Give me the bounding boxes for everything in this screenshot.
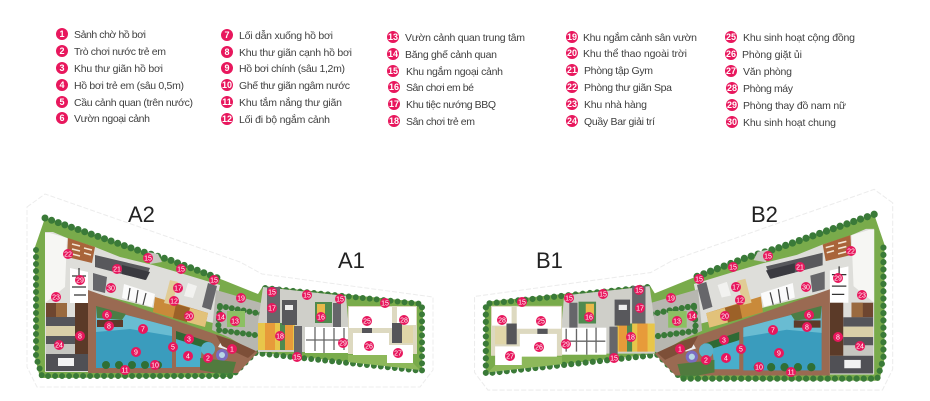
number markers: towers A1 and A2: 15 [293,354,301,362]
number markers: towers B1 and B2: 19 [667,296,675,302]
legend: amenities 19-24: 20 [567,48,577,58]
number markers: towers B1 and B2: 15 [565,296,573,302]
number markers: towers A1 and A2: 24 [55,342,63,350]
legend: amenities 1-6: 4 [59,80,65,90]
legend: amenities 13-18: Sân chơi em bé [406,82,474,94]
site plan: towers B1 and B2 [475,189,893,390]
number markers: towers A1 and A2: 18 [276,334,284,340]
number markers: towers B1 and B2: 18 [627,334,635,342]
number markers: towers A1 and A2: 21 [113,266,121,274]
legend: amenities 13-18: 15 [388,66,398,76]
number markers: towers A1 and A2: 15 [177,266,185,274]
legend: amenities 7-12: Khu thư giãn cạnh hồ bơi [239,47,352,59]
number markers: towers B1 and B2: 15 [729,264,737,272]
legend: amenities 13-18: Sân chơi trẻ em [406,116,475,128]
number markers: towers A1 and A2: 12 [170,298,178,306]
number markers: towers A1 and A2: 22 [64,252,72,258]
legend: amenities 25-30: Khu sinh hoạt cộng đồng [743,32,855,44]
number markers: towers B1 and B2: 8 [836,334,840,342]
legend: amenities 19-24: Khu ngắm cảnh sân vườn [583,31,697,44]
number markers: towers A1 and A2: 8 [78,334,82,340]
legend: amenities 1-6: Vườn ngoại cảnh [74,113,150,125]
legend: amenities 1-6 [56,28,193,125]
legend: amenities 7-12: 10 [222,80,232,90]
number markers: towers B1 and B2: 6 [807,312,811,320]
heading: B2: B2 [751,202,778,227]
legend: amenities 19-24: Phòng thư giãn Spa [584,82,672,94]
legend: amenities 1-6: 6 [59,113,65,123]
legend: amenities 25-30 [725,31,855,129]
legend: amenities 7-12: Lối đi bộ ngắm cảnh [239,113,330,126]
number markers: towers A1 and A2: 7 [141,326,145,334]
legend: amenities 13-18: Băng ghế cảnh quan [405,49,497,61]
number markers: towers A1 and A2: 29 [339,340,347,348]
legend: amenities 19-24 [566,31,697,128]
number markers: towers B1 and B2: 28 [498,318,506,324]
legend: amenities 25-30: 28 [727,83,737,93]
legend: amenities 1-6: 5 [59,97,65,107]
legend: amenities 1-6: 3 [59,63,65,73]
number markers: towers A1 and A2: 15 [268,290,276,296]
legend: amenities 13-18: Vườn cảnh quan trung tâm [405,32,525,44]
number markers: towers B1 and B2: 10 [755,364,763,372]
heading: A2: A2 [128,202,155,227]
number markers: towers A1 and A2: 16 [317,314,325,322]
legend: amenities 7-12: 7 [224,30,230,40]
number markers: towers A1 and A2 [51,249,409,375]
number markers: towers A1 and A2: 3 [187,336,191,344]
number markers: towers B1 and B2: 2 [704,358,708,364]
legend: amenities 7-12: Khu tắm nắng thư giãn [239,96,342,109]
number markers: towers A1 and A2: 5 [171,344,175,352]
number markers: towers A1 and A2: 20 [185,314,193,320]
number markers: towers B1 and B2 [497,246,867,377]
number markers: towers A1 and A2: 27 [394,350,402,358]
legend: amenities 7-12: Ghế thư giãn ngâm nước [239,80,350,92]
legend: amenities 19-24: 21 [567,65,577,75]
number markers: towers B1 and B2: 25 [537,318,545,326]
legend: amenities 1-6: 1 [59,29,65,39]
number markers: towers B1 and B2: 3 [722,338,726,344]
number markers: towers B1 and B2: 22 [847,248,855,256]
legend: amenities 1-6: Cầu cảnh quan (trên nước) [74,97,193,109]
legend: amenities 7-12: 9 [224,63,230,73]
number markers: towers B1 and B2: 14 [688,314,696,320]
legend: amenities 13-18: Khu tiệc nướng BBQ [406,99,496,111]
legend: amenities 13-18: 18 [389,116,399,126]
number markers: towers B1 and B2: 9 [777,350,781,358]
number markers: towers A1 and A2: 23 [52,294,60,302]
heading: B1: B1 [536,248,563,273]
number markers: towers B1 and B2: 15 [764,254,772,260]
number markers: towers B1 and B2: 17 [636,306,644,312]
legend: amenities 13-18 [387,31,525,128]
legend: amenities 1-6: Khu thư giãn hồ bơi [74,63,163,75]
number markers: towers B1 and B2: 13 [673,318,681,326]
number markers: towers B1 and B2: 17 [732,284,740,292]
number markers: towers B1 and B2: 26 [535,344,543,352]
legend: amenities 7-12: 11 [222,97,232,107]
legend: amenities 25-30: Phòng thay đồ nam nữ [743,100,846,112]
number markers: towers A1 and A2: 15 [144,256,152,262]
number markers: towers B1 and B2: 16 [585,314,593,322]
number markers: towers A1 and A2: 17 [268,306,276,312]
legend: amenities 7-12: 12 [222,114,232,124]
number markers: towers B1 and B2: 30 [802,284,810,292]
legend: amenities 13-18: Khu ngắm ngoại cảnh [406,65,503,78]
number markers: towers A1 and A2: 2 [206,356,210,362]
legend: amenities 25-30: 29 [727,100,737,110]
legend: amenities 25-30: 26 [726,49,736,59]
number markers: towers A1 and A2: 15 [336,296,344,304]
number markers: towers A1 and A2: 17 [174,286,182,292]
legend: amenities 25-30: Phòng giặt ủi [742,49,802,61]
number markers: towers B1 and B2: 27 [506,354,514,360]
number markers: towers A1 and A2: 8 [107,324,111,330]
number markers: towers A1 and A2: 9 [134,350,138,356]
number markers: towers A1 and A2: 28 [400,318,408,324]
number markers: towers B1 and B2: 8 [805,324,809,332]
legend: amenities 19-24: 24 [567,116,577,126]
legend: amenities 19-24: Quầy Bar giải trí [584,116,655,128]
number markers: towers B1 and B2: 15 [518,300,526,306]
number markers: towers A1 and A2: 4 [186,354,190,360]
legend: amenities 19-24: Khu thể thao ngoài trời [583,48,687,60]
number markers: towers B1 and B2: 29 [834,276,842,282]
number markers: towers B1 and B2: 1 [678,346,682,354]
legend: amenities 7-12 [221,29,352,126]
number markers: towers A1 and A2: 15 [303,292,311,300]
legend: amenities 13-18: 14 [388,49,398,59]
number markers: towers A1 and A2: 10 [151,362,159,370]
number markers: towers B1 and B2: 23 [858,292,866,300]
legend: amenities 13-18: 16 [389,82,399,92]
legend: amenities 19-24: 23 [567,99,577,109]
number markers: towers A1 and A2: 26 [365,344,373,350]
number markers: towers A1 and A2: 15 [210,278,218,284]
number markers: towers B1 and B2: 21 [796,264,804,272]
number markers: towers B1 and B2: 15 [610,356,618,362]
legend: amenities 19-24: 22 [567,82,577,92]
legend: amenities 25-30: Khu sinh hoạt chung [743,117,836,129]
number markers: towers A1 and A2: 25 [363,318,371,326]
number markers: towers B1 and B2: 20 [721,314,729,320]
number markers: towers B1 and B2: 12 [736,298,744,304]
legend: amenities 19-24: Phòng tập Gym [584,65,653,77]
number markers: towers B1 and B2: 5 [739,346,743,354]
legend: amenities 19-24: Khu nhà hàng [584,99,647,111]
legend: amenities 7-12: Lối dẫn xuống hồ bơi [239,29,333,42]
legend: amenities 7-12: Hồ bơi chính (sâu 1,2m) [239,63,345,75]
number markers: towers A1 and A2: 14 [217,314,225,322]
legend: amenities 25-30: Văn phòng [743,66,792,78]
number markers: towers B1 and B2: 15 [635,288,643,294]
legend: amenities 1-6: Trò chơi nước trẻ em [74,46,166,58]
legend: amenities 25-30: 30 [727,117,737,127]
legend: amenities 13-18: 13 [388,32,398,42]
legend: amenities 25-30: 27 [726,66,736,76]
legend: amenities 7-12: 8 [224,47,230,57]
number markers: towers B1 and B2: 15 [695,276,703,284]
number markers: towers A1 and A2: 11 [121,368,129,374]
number markers: towers B1 and B2: 7 [771,328,775,334]
legend: amenities 19-24: 19 [567,32,577,42]
legend: amenities 1-6: Hồ bơi trẻ em (sâu 0,5m) [74,80,184,92]
legend: amenities 25-30: Phòng máy [743,83,794,95]
legend: amenities 1-6: Sảnh chờ hồ bơi [74,29,146,41]
number markers: towers B1 and B2: 11 [787,370,795,376]
number markers: towers A1 and A2: 15 [381,300,389,308]
number markers: towers B1 and B2: 24 [856,344,864,350]
number markers: towers A1 and A2: 19 [237,296,245,302]
number markers: towers B1 and B2: 4 [724,356,728,362]
legend: amenities 25-30: 25 [726,32,736,42]
number markers: towers B1 and B2: 29 [562,342,570,348]
heading: A1: A1 [338,248,365,273]
legend: amenities 13-18: 17 [389,99,399,109]
number markers: towers A1 and A2: 1 [230,346,234,354]
legend: amenities 1-6: 2 [59,46,65,56]
site plan: towers A1 and A2 [27,194,433,387]
number markers: towers B1 and B2: 15 [599,292,607,298]
number markers: towers A1 and A2: 30 [107,286,115,292]
number markers: towers A1 and A2: 13 [231,318,239,326]
number markers: towers A1 and A2: 6 [105,312,109,320]
number markers: towers A1 and A2: 29 [76,278,84,284]
